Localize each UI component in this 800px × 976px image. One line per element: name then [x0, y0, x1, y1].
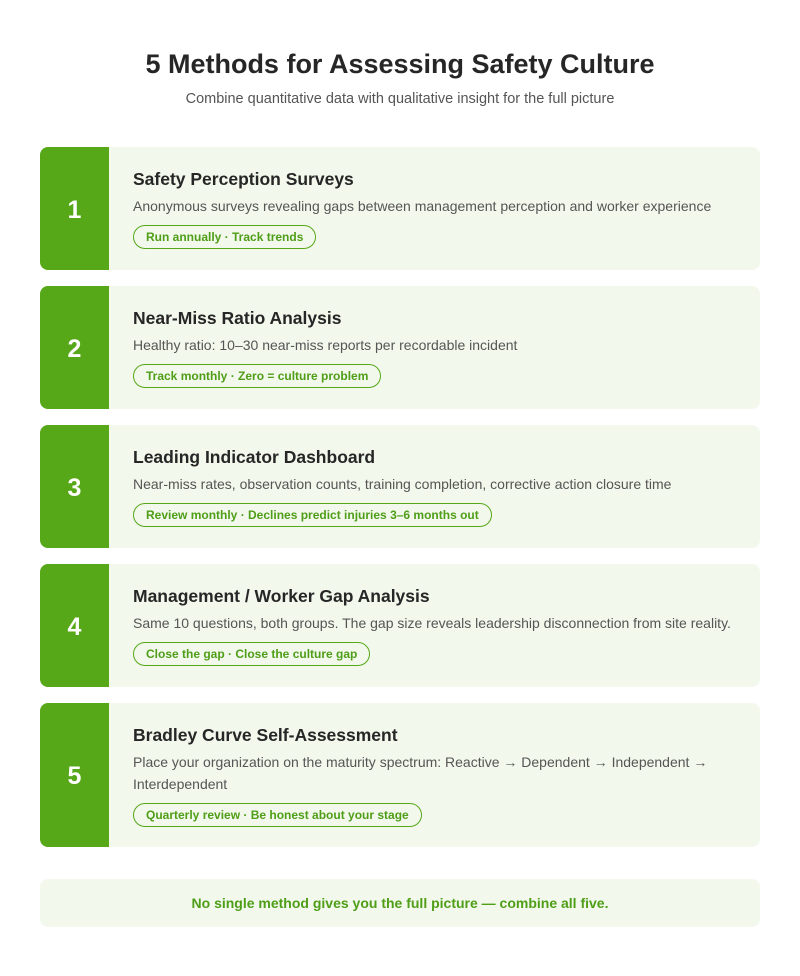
card 5: Quarterly review · Be honest about your stage	[146, 808, 409, 822]
card 5: Bradley Curve Self-Assessment	[133, 725, 398, 745]
card 2: Near-Miss Ratio Analysis	[133, 308, 341, 328]
card 1: Run annually · Track trends	[146, 230, 303, 244]
card 4: 4	[68, 612, 81, 640]
card 4: Close the gap · Close the culture gap	[146, 647, 357, 661]
card 1: Anonymous surveys revealing gaps between management perception and worker experience	[133, 198, 711, 214]
card 4: Management / Worker Gap Analysis	[133, 586, 430, 606]
card 3: Near-miss rates, observation counts, training completion, corrective action closure time	[133, 476, 671, 492]
card 2: Track monthly · Zero = culture problem	[146, 369, 368, 383]
card 3: 3	[68, 474, 81, 502]
card 2	[40, 286, 760, 409]
card 5: 5	[68, 762, 81, 790]
card 1	[40, 147, 760, 270]
card 3: Review monthly · Declines predict injuries 3–6 months out	[146, 508, 479, 522]
title: 5 Methods for Assessing Safety Culture	[145, 49, 655, 79]
card 1: 1	[68, 196, 81, 224]
card 2: Healthy ratio: 10–30 near-miss reports per recordable incident	[133, 337, 517, 353]
card 3	[40, 425, 760, 548]
card 5	[40, 703, 760, 847]
card 4: Same 10 questions, both groups. The gap size reveals leadership disconnection from site reality.	[133, 615, 731, 631]
footer callout: No single method gives you the full picture — combine all five.	[192, 895, 608, 911]
card 4	[40, 564, 760, 687]
subtitle: Combine quantitative data with qualitative insight for the full picture	[186, 91, 614, 107]
card 5: Place your organization on the maturity spectrum: Reactive → Dependent → Independent → Interdependent	[133, 754, 707, 792]
footer callout	[40, 879, 760, 927]
card 3: Leading Indicator Dashboard	[133, 447, 375, 467]
card 1: Safety Perception Surveys	[133, 169, 354, 189]
card 2: 2	[68, 334, 81, 362]
